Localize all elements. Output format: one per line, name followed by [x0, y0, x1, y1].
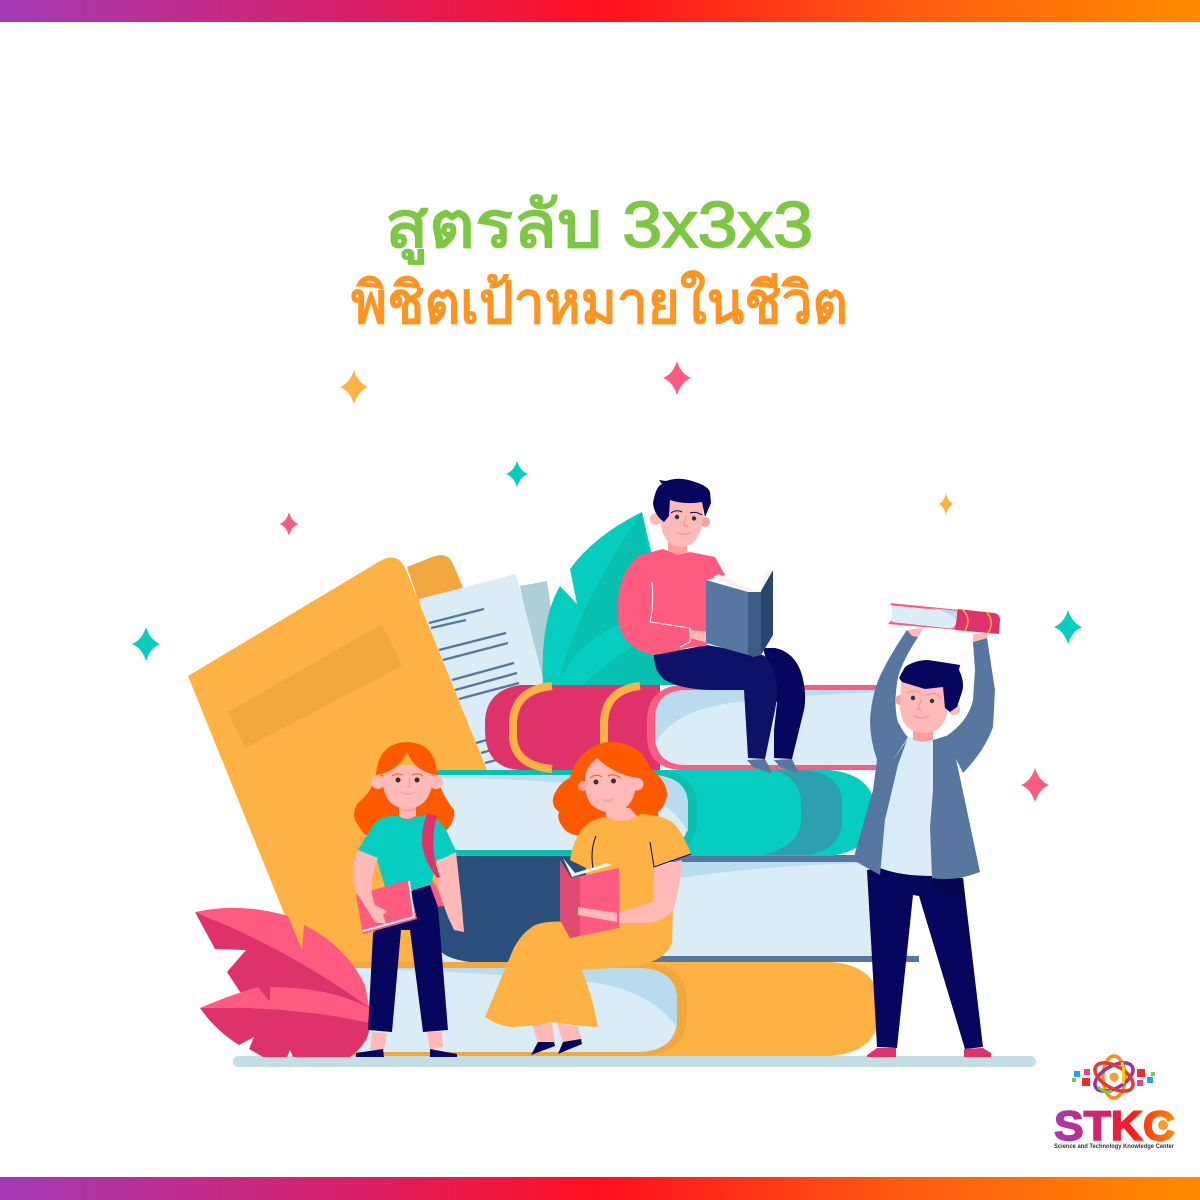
logo wordmark: STKC	[1054, 1102, 1175, 1149]
face	[660, 500, 703, 547]
pink plant	[195, 908, 370, 1057]
big yellow folder	[188, 558, 500, 965]
star: teal small	[506, 461, 528, 487]
eyes	[396, 778, 420, 782]
red top book	[485, 685, 880, 770]
ears	[630, 778, 644, 790]
jacket	[853, 630, 995, 879]
book stack	[351, 685, 919, 1056]
bottom orange book	[351, 962, 880, 1056]
person: girl with book and backpack	[353, 742, 464, 1057]
eyes	[675, 515, 696, 521]
eyes	[594, 778, 616, 784]
person: woman reading, seated	[485, 742, 691, 1055]
star: teal left	[132, 627, 160, 661]
star: pink small	[280, 512, 298, 536]
front paper with lines	[419, 574, 546, 775]
hands	[907, 628, 923, 637]
heading line 1: สูตรลับ 3x3x3	[385, 188, 813, 264]
back folder tab	[407, 555, 465, 605]
dress	[485, 814, 691, 1027]
eyes	[911, 696, 934, 703]
shoes	[356, 1049, 457, 1057]
neck	[605, 808, 637, 826]
logo: STKC	[1054, 1056, 1175, 1150]
face	[383, 765, 432, 809]
teal plant	[543, 512, 680, 685]
hand	[578, 907, 617, 922]
left arm	[353, 850, 387, 924]
socks	[747, 759, 772, 773]
star: pink	[663, 361, 691, 395]
ears	[371, 775, 385, 789]
bottom gradient bar	[0, 1177, 1200, 1200]
title	[351, 188, 848, 336]
star: gold	[340, 370, 368, 404]
neck	[913, 730, 933, 742]
bag	[430, 877, 450, 907]
back hair	[354, 775, 454, 835]
legs	[370, 1032, 443, 1050]
arm	[578, 860, 682, 923]
star: teal right	[1054, 610, 1082, 644]
open book	[706, 568, 773, 657]
hair	[653, 479, 711, 522]
ears and neck	[650, 513, 662, 525]
hair top	[376, 742, 437, 775]
hand	[690, 630, 722, 644]
person: man sitting with book	[618, 479, 805, 773]
shirt	[880, 738, 935, 876]
strap	[422, 813, 440, 878]
brows and mouth	[671, 511, 702, 515]
person: man holding book overhead	[853, 603, 1000, 1057]
held book	[356, 880, 417, 934]
shirt	[358, 815, 456, 890]
ears	[895, 695, 905, 705]
sweater	[618, 549, 725, 655]
sparkle stars	[132, 361, 1082, 802]
back paper	[520, 581, 556, 680]
teal book	[437, 770, 875, 856]
illustration: reading people on books	[188, 479, 1036, 1067]
pants	[763, 648, 805, 759]
star: gold small	[938, 493, 954, 515]
heading line 2: พิชิตเป้าหมายในชีวิต	[351, 270, 848, 336]
logo atom icon	[1072, 1056, 1155, 1098]
star: pink right	[1021, 768, 1049, 802]
top gradient bar	[0, 0, 1200, 22]
dress detail lines	[592, 836, 691, 868]
navy book	[437, 855, 919, 962]
pants	[867, 868, 983, 1049]
neck	[399, 805, 416, 819]
open book	[560, 858, 619, 938]
logo dot	[1158, 1120, 1168, 1130]
face	[900, 680, 948, 733]
shoes	[531, 1039, 582, 1055]
shoes	[867, 1048, 896, 1057]
logo caption: Science and Technology Knowledge Center	[1054, 1144, 1175, 1150]
book overhead	[888, 603, 1000, 634]
back hair	[553, 742, 667, 835]
legs	[532, 1023, 582, 1043]
ground line	[233, 1056, 1036, 1067]
right arm	[437, 852, 464, 932]
hair	[899, 660, 963, 712]
face	[585, 758, 638, 813]
pants	[368, 885, 448, 1032]
